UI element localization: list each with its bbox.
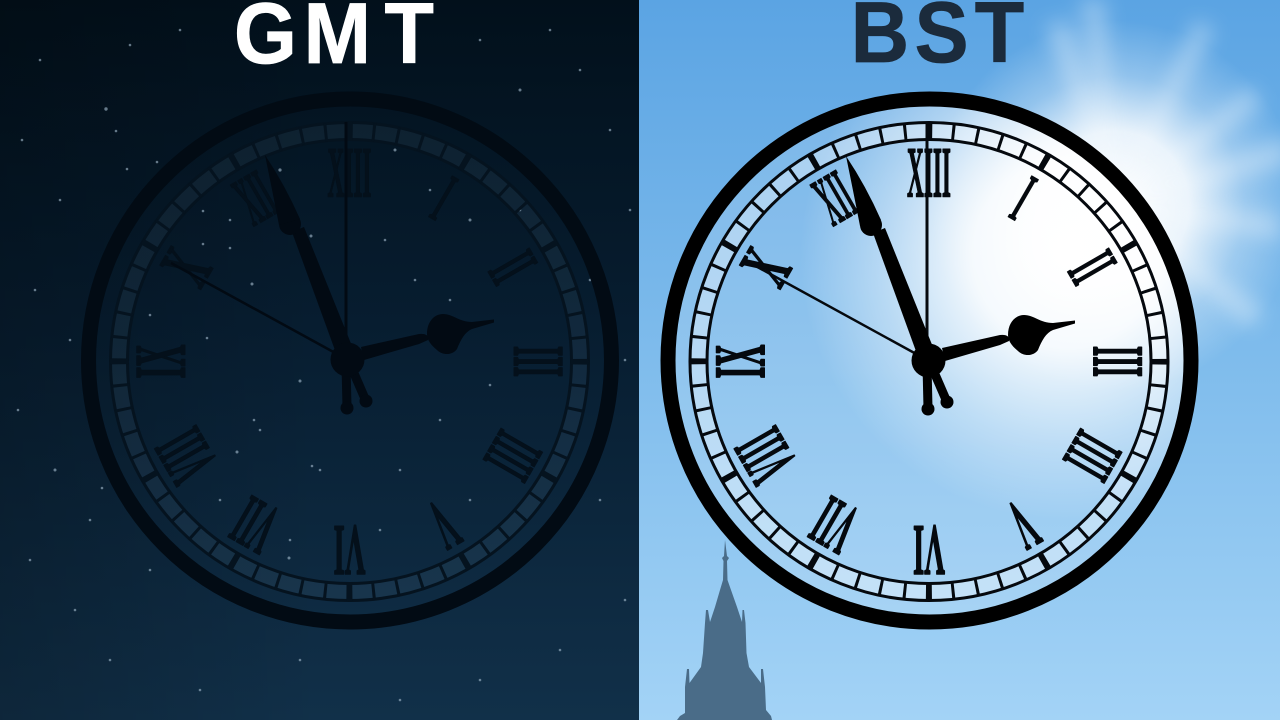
numerals: II [1053,239,1132,295]
numerals: IX [700,344,780,378]
outer ring [88,99,612,622]
numerals: II [474,239,553,295]
numerals: V [415,486,473,565]
tower silhouette [677,540,772,720]
sun rays [1045,0,1280,330]
numerals: III [1078,346,1158,377]
panel: BST day [639,0,1280,720]
numerals: I [420,161,468,235]
numerals: VIII [140,416,232,496]
numerals: IX [120,344,200,378]
numerals: VII [798,481,871,569]
numerals: VI [334,510,366,590]
numerals: V [995,486,1052,565]
numerals: IIII [469,420,557,492]
numerals: XII [221,155,289,240]
clock hands [171,122,494,414]
face glow [674,106,1184,616]
numerals: IIII [1049,420,1137,492]
numerals: VI [913,510,945,590]
clock: GMT [88,99,612,622]
numerals: X [145,236,227,298]
clock face [674,106,1184,616]
sun glow [900,0,1280,420]
daytime sky [639,0,1280,720]
numerals: III [498,346,578,377]
numerals [120,132,578,590]
outer ring [668,99,1191,622]
numerals [700,132,1158,590]
numerals: XIII [907,132,951,212]
numerals: XIII [328,132,372,212]
panel: GMT night [0,0,639,720]
numerals: VIII [719,416,811,496]
clock: BST [668,99,1191,622]
numerals: VII [219,481,291,569]
numerals: XII [801,155,868,240]
minute track [110,122,588,600]
clock hands [752,123,1075,416]
numerals: X [724,236,806,298]
minute track [690,122,1168,600]
stars [17,29,631,701]
numerals: I [999,161,1048,235]
night sky [0,0,639,720]
